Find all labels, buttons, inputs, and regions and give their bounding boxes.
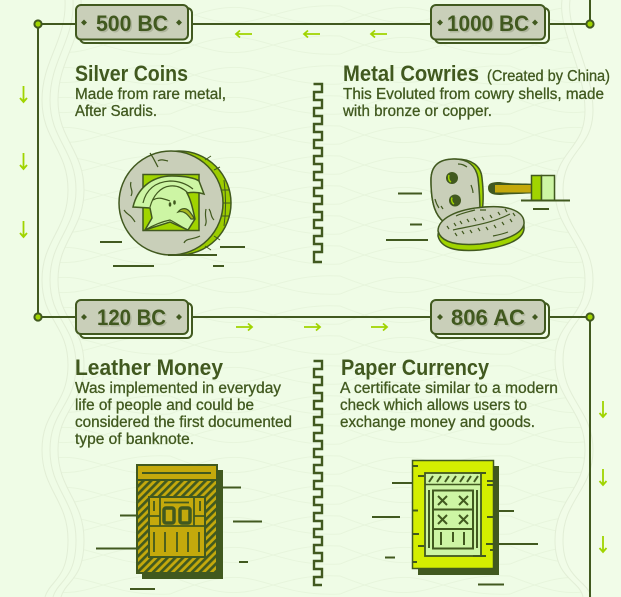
text: metal cowries [342, 61, 610, 120]
text: metal cowries: (Created by China) [487, 68, 610, 85]
icon: silver coin [119, 151, 231, 255]
text: metal cowries: with bronze or copper. [342, 103, 492, 120]
text: leather money [75, 355, 292, 448]
badge: 500 BC: 500 BC [96, 11, 168, 36]
icon: hammer [488, 176, 554, 200]
lines: leather motion [96, 488, 262, 589]
node: top right [586, 20, 594, 28]
badge: 120 BC: 120 BC [97, 305, 166, 330]
text: paper currency [340, 355, 558, 431]
node: middle left [34, 313, 42, 321]
badge: 1000 BC [431, 5, 549, 43]
badge: 806 AC [431, 300, 549, 338]
arrows: rightward row [236, 324, 387, 330]
text: silver coins: Silver Coins [75, 61, 188, 86]
lines: coin motion [100, 242, 245, 266]
lines: cowrie motion [386, 194, 570, 240]
badge: 806 AC: 806 AC [451, 305, 525, 330]
divider: top zigzag [314, 84, 322, 262]
text: leather money: life of people and could be [75, 397, 254, 414]
node: middle right [586, 313, 594, 321]
icon: leather banknote [137, 465, 223, 579]
lines: paper motion [372, 483, 538, 584]
badge: 500 BC [76, 5, 192, 43]
text: paper currency: exchange money and goods. [340, 414, 535, 431]
text: metal cowries: This Evoluted from cowry shells, made [343, 86, 604, 103]
badge: 500 BC: 500 BC [98, 12, 170, 38]
arrows: left downward column [20, 86, 27, 237]
icon: metal cowries [431, 159, 524, 250]
text: paper currency: Paper Currency [341, 355, 490, 380]
badge: 120 BC: 120 BC [98, 306, 168, 332]
arrows: leftward row [236, 30, 387, 38]
badge: 806 AC: 806 AC [452, 306, 527, 332]
text: silver coins: After Sardis. [75, 103, 157, 120]
badge: 1000 BC: 1000 BC [447, 11, 529, 36]
text: paper currency: check which allows users to [340, 397, 527, 414]
text: silver coins: Made from rare metal, [75, 86, 226, 103]
text: leather money: type of banknote. [75, 431, 194, 448]
badge: 1000 BC: 1000 BC [448, 12, 531, 38]
divider: bottom zigzag [314, 361, 322, 585]
text: leather money: considered the first documented [75, 414, 292, 431]
text: leather money: Was implemented in everyday [75, 380, 281, 397]
badge: 120 BC [76, 300, 192, 338]
node: top left [34, 20, 42, 28]
text: paper currency: A certificate similar to a modern [340, 380, 558, 397]
icon: paper currency [412, 460, 499, 575]
text: leather money: Leather Money [75, 355, 224, 380]
text: silver coins [75, 61, 226, 120]
arrows: right downward column [600, 401, 606, 552]
text: metal cowries: Metal Cowries [343, 61, 479, 86]
